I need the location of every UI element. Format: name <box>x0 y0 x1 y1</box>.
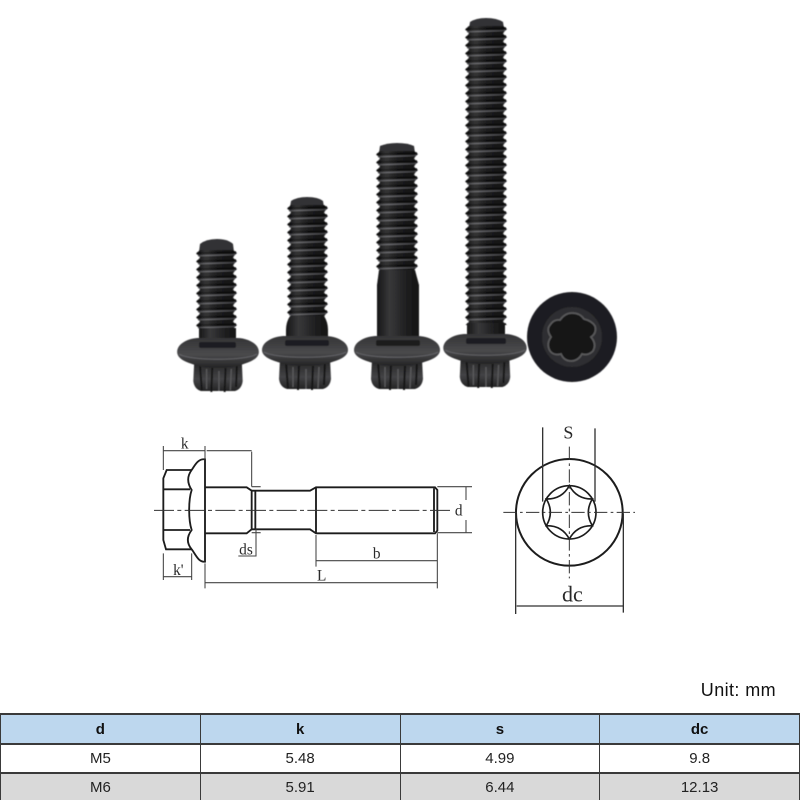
torx recess <box>546 486 592 539</box>
unit label: Unit: mm <box>701 680 776 700</box>
head outline <box>163 459 205 562</box>
table header row: s <box>496 720 504 738</box>
dimension labels: k' <box>173 562 184 579</box>
dimension labels: b <box>373 546 381 563</box>
outer circle <box>516 459 623 566</box>
table row M6: 5.91 <box>286 778 315 796</box>
dimension labels: dc <box>562 582 583 607</box>
table header row <box>0 713 800 743</box>
table row M5 <box>0 743 800 772</box>
technical drawing: bolt head end view <box>503 422 635 614</box>
table row M5: 9.8 <box>689 750 710 767</box>
table row M6: 12.13 <box>681 778 718 796</box>
dimensions table <box>0 713 800 800</box>
table row M6 <box>0 772 800 800</box>
table header row: dc <box>691 720 708 738</box>
table row M5: M5 <box>90 750 111 767</box>
dimension lines <box>516 427 623 614</box>
table row M5: 5.48 <box>286 750 315 767</box>
bolt 2 <box>262 197 348 390</box>
dimension labels: d <box>455 503 463 520</box>
table header row: k <box>296 720 304 738</box>
photo: bolts <box>177 18 617 392</box>
dimension labels: S <box>563 422 573 442</box>
bolt 3 <box>354 143 440 390</box>
dimension labels <box>173 436 463 585</box>
table row M6: 6.44 <box>485 778 514 796</box>
bolt 1 <box>177 239 259 392</box>
table header row: d <box>96 720 105 738</box>
dimension lines <box>163 446 472 588</box>
technical drawing: bolt side view <box>154 436 472 588</box>
dimension labels <box>562 422 583 607</box>
dimension labels: L <box>317 568 326 585</box>
shank and thread outline <box>205 487 437 533</box>
dimension labels: k <box>181 436 189 453</box>
centre lines <box>503 447 635 578</box>
bolt head, end view <box>527 292 617 382</box>
table row M6: M6 <box>90 778 111 796</box>
table row M5: 4.99 <box>485 750 514 767</box>
recess circle <box>543 486 596 539</box>
dimension labels: ds <box>239 541 253 558</box>
bolt 4 <box>443 18 527 388</box>
centre line <box>154 509 450 512</box>
